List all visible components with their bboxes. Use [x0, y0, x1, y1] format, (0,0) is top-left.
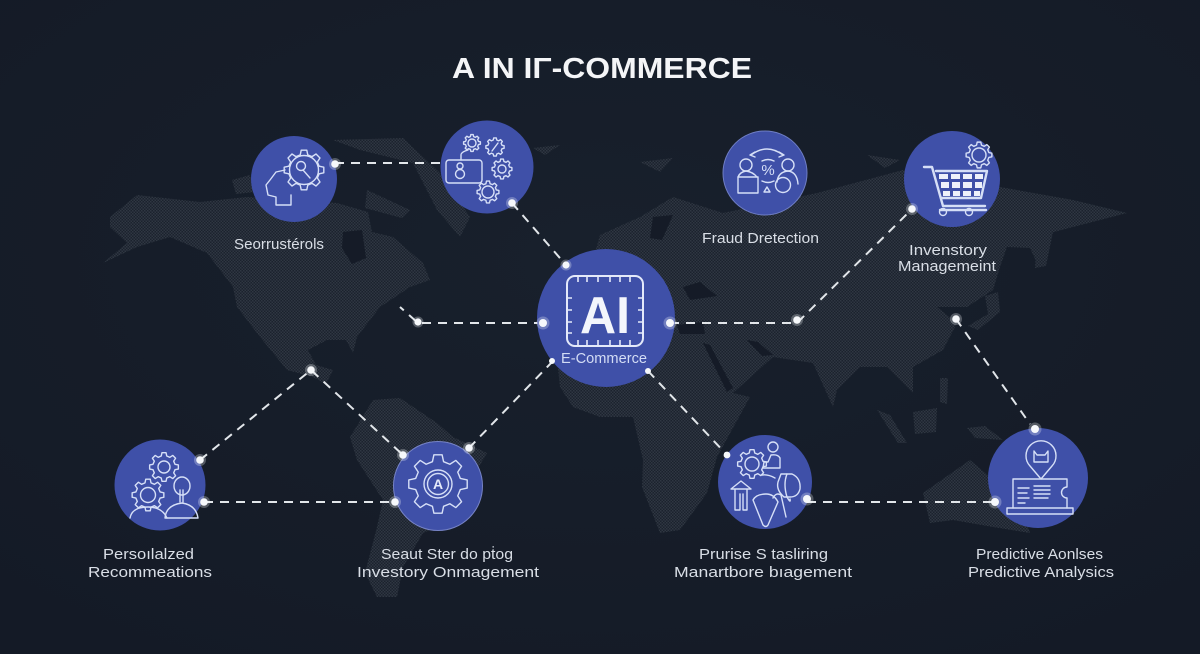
title: A IN IΓ-COMMERCE	[452, 53, 752, 85]
node: top centre	[440, 120, 534, 214]
node: central gear	[394, 442, 482, 530]
label: purchase tracking	[674, 546, 853, 581]
icon: fraud detection people: %	[761, 162, 775, 179]
label: purchase tracking: Manartbore bıagement	[674, 564, 853, 581]
connector nodes	[194, 158, 1042, 508]
icon: shopping cart	[924, 142, 992, 216]
label: purchase tracking: Prurise S tasliring	[699, 546, 828, 563]
label: personalized recommendations: Persoılalzed	[103, 546, 194, 563]
central AI hub	[537, 249, 675, 387]
map: South America	[350, 398, 487, 597]
label: central gear: Investory Onmagement	[357, 564, 540, 581]
icon: chat box and gears	[446, 135, 512, 203]
hub label: E-Commerce	[561, 351, 647, 367]
icon: people and gears	[130, 453, 198, 518]
node: inventory cart	[904, 131, 1000, 227]
icon: pin and laptop	[1007, 441, 1073, 514]
node: predictive analytics	[988, 428, 1088, 528]
map: islands of Asia	[533, 145, 1053, 443]
label: inventory management: Managemeint	[898, 258, 997, 275]
node: fraud detection	[723, 131, 807, 215]
label: central gear: Seaut Ster do pṫog	[381, 545, 513, 563]
map: Arctic islands and Greenland	[232, 138, 470, 237]
connector lines	[200, 163, 1030, 502]
label: inventory management: Invenstory	[909, 242, 988, 259]
map: Africa and Eurasia	[556, 170, 1127, 533]
label: predictive analytics: Predictive Aonlses	[976, 546, 1103, 563]
icon: gear with A: A	[433, 476, 443, 492]
label: inventory management	[898, 242, 997, 275]
label: top left: Seorrustérols	[234, 236, 324, 253]
node: top left	[251, 136, 337, 222]
label: personalized recommendations: Recommeations	[88, 564, 212, 581]
map: North America	[103, 195, 430, 384]
dotted world map	[103, 138, 1127, 597]
icon: gear, person, tools	[731, 442, 800, 526]
label: predictive analytics	[968, 546, 1114, 581]
label: predictive analytics: Predictive Analysics	[968, 564, 1114, 581]
label: central gear	[357, 545, 540, 581]
label: fraud detection: Fraud Dretection	[702, 230, 819, 247]
label: personalized recommendations	[88, 546, 212, 581]
map: Australia	[923, 460, 1030, 533]
icon: head with gear	[266, 150, 324, 205]
icon: AI chip: AI	[580, 287, 630, 345]
node: personalized recommendations	[114, 440, 206, 530]
map: inland seas	[342, 215, 773, 392]
node: purchase tracking	[718, 435, 812, 529]
